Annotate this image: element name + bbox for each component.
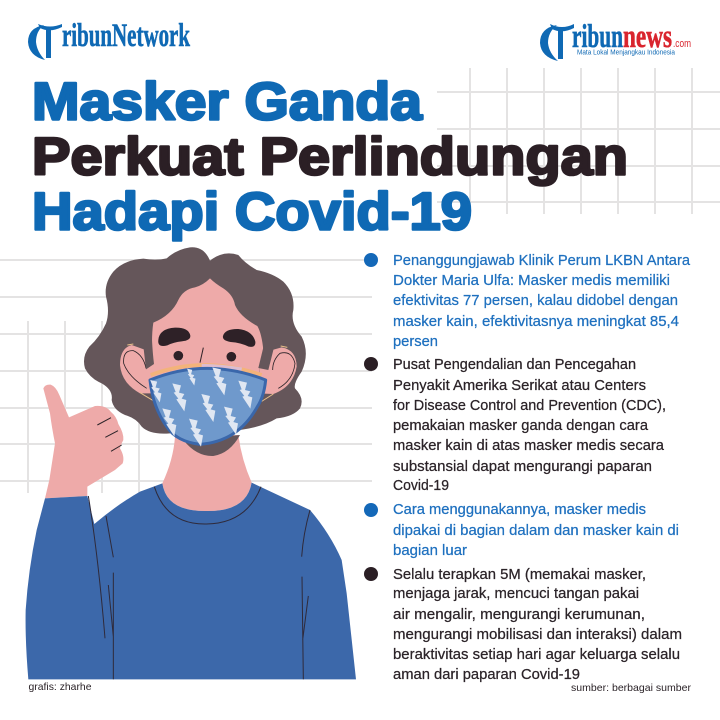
face xyxy=(152,278,263,397)
hair under mask xyxy=(183,435,240,456)
hand: thumbs up xyxy=(43,385,123,498)
bullet 3: bagian luar xyxy=(393,542,467,559)
ear: right xyxy=(258,346,297,402)
logo: Tribunnews: Mata Lokal Menjangkau Indonesia xyxy=(577,48,676,56)
title: Hadapi Covid-19 xyxy=(32,182,472,242)
mask: blue fabric with lightning pattern xyxy=(150,367,266,447)
bullet 3: Cara menggunakannya, masker medis xyxy=(393,501,646,518)
bullet 4: beraktivitas setiap hari agar keluarga selalu xyxy=(393,646,680,663)
neck xyxy=(162,435,252,511)
logo: Tribunnews: .com xyxy=(673,38,691,50)
bullet 1 xyxy=(364,252,691,350)
bullet 1: efektivitas 77 persen, kalau didobel dengan xyxy=(393,292,678,309)
bullet 1: masker kain, efektivitasnya meningkat 85,4 xyxy=(393,313,679,330)
logo: TribunNetwork: ribunNetwork xyxy=(62,18,190,54)
illustration: person with double mask giving thumbs up xyxy=(26,247,356,679)
bullet 4 xyxy=(364,566,682,683)
mask: outer layer xyxy=(151,365,262,375)
logo: Tribunnews: news xyxy=(623,19,672,55)
bullet 4: air mengalir, mengurangi kerumunan, xyxy=(393,606,645,623)
credit: grafis: grafis: zharhe xyxy=(28,681,92,693)
hair xyxy=(84,247,306,434)
bullet 2: Pusat Pengendalian dan Pencegahan xyxy=(393,356,636,373)
logo: TribunNetwork xyxy=(28,18,190,60)
bullet 3 xyxy=(364,501,679,559)
eyebrows xyxy=(158,328,190,346)
title: Perkuat Perlindungan xyxy=(32,128,628,186)
ear: left xyxy=(120,344,157,401)
bullet 4: Selalu terapkan 5M (memakai masker, xyxy=(393,566,646,583)
bullet 1: Dokter Maria Ulfa: Masker medis memiliki xyxy=(393,272,670,289)
sideburns xyxy=(143,340,154,369)
bullet 2: Penyakit Amerika Serikat atau Centers xyxy=(393,377,646,394)
title: Masker Ganda xyxy=(32,72,423,132)
bullet 4: mengurangi mobilisasi dan interaksi) dalam xyxy=(393,626,682,643)
credit: sumber: sumber: berbagai sumber xyxy=(571,682,691,694)
bullet 4: menjaga jarak, mencuci tangan pakai xyxy=(393,585,639,602)
nose xyxy=(200,348,203,363)
bullet 3: dipakai di bagian dalam dan masker kain di xyxy=(393,522,679,539)
bullet 2: masker kain di atas masker medis secara xyxy=(393,437,665,454)
bullet 2: substansial dapat mengurangi paparan xyxy=(393,458,652,475)
bullet 2: Covid-19 xyxy=(393,477,449,494)
sweater xyxy=(26,483,356,679)
bullet 1: persen xyxy=(393,333,438,350)
bullet 1: Penanggungjawab Klinik Perum LKBN Antara xyxy=(393,252,691,269)
eyes xyxy=(173,351,183,360)
bullet 2 xyxy=(364,356,666,494)
title xyxy=(32,72,628,242)
logo: Tribunnews: ribun xyxy=(572,19,623,55)
bullet 2: pemakaian masker ganda dengan cara xyxy=(393,417,649,434)
bullet 2: for Disease Control and Prevention (CDC), xyxy=(393,397,666,414)
bullet 4: aman dari paparan Covid-19 xyxy=(393,666,580,683)
logo: Tribunnews xyxy=(540,19,691,61)
